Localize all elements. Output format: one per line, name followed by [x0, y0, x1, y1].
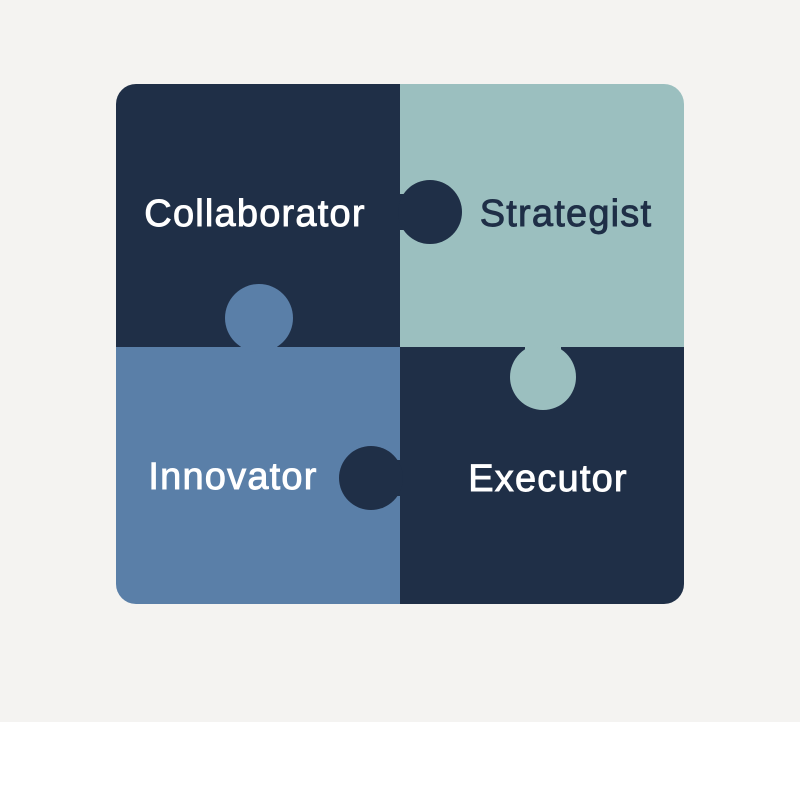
label: innovator: Innovator — [148, 456, 318, 498]
knob: strategist into executor — [510, 344, 576, 410]
piece: strategist — [400, 84, 684, 347]
knob: collaborator into strategist — [398, 180, 462, 244]
label: strategist: Strategist — [480, 193, 652, 235]
knob: executor into innovator — [339, 446, 403, 510]
piece: executor — [400, 347, 684, 604]
piece: innovator — [116, 347, 400, 604]
knob: innovator into collaborator — [225, 284, 293, 352]
label: collaborator: Collaborator — [144, 193, 366, 235]
piece: collaborator — [116, 84, 400, 347]
label: executor: Executor — [468, 458, 628, 500]
puzzle graphic — [116, 84, 684, 604]
